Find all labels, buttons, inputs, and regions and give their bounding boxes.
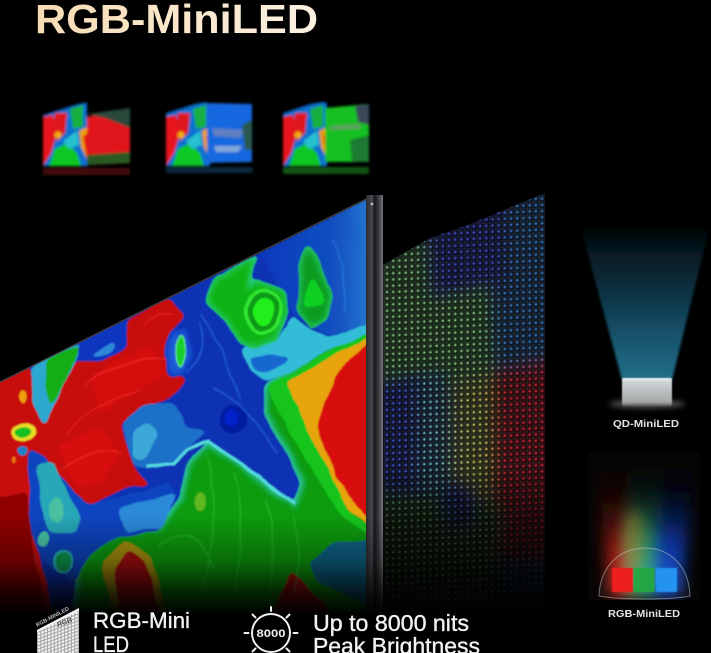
thumbnail: red scene (43, 102, 130, 175)
panel bottom fade (383, 465, 551, 615)
glass dome (599, 548, 690, 599)
cyan line (147, 442, 295, 504)
LED backlight panel (383, 193, 545, 604)
icon: LED panel: RGB-MINILED (35, 606, 70, 629)
top right blue (260, 200, 366, 336)
TV bezel (366, 195, 383, 620)
thumbnail row: three TV demos (43, 100, 369, 175)
main red region (0, 298, 186, 610)
green chip (634, 568, 654, 592)
light beam (580, 225, 710, 380)
cyan swirl (241, 316, 366, 382)
text (93, 608, 190, 653)
bottom black band (0, 613, 560, 653)
panel colour zones dim tint (383, 193, 545, 556)
orange wedge (286, 337, 366, 524)
green band (268, 333, 366, 534)
RGB-MiniLED diagram (590, 470, 700, 617)
feature: RGB-Mini LED (35, 606, 190, 653)
teal blob (37, 462, 82, 533)
TV bottom fade (0, 515, 384, 615)
small oval D (166, 328, 193, 375)
icon: 8000 sun (244, 607, 298, 652)
lower-left blue basin (28, 448, 177, 582)
left green sliver (32, 342, 83, 427)
top edge of TV (0, 199, 366, 382)
LED dots (385, 194, 544, 602)
thumbnail: blue scene (166, 101, 253, 173)
top blue pocket (76, 322, 128, 362)
thumbnail: green scene (283, 100, 369, 174)
panel grid lines (383, 195, 545, 544)
text (313, 610, 480, 653)
dark backdrop (588, 453, 700, 600)
icon: 8000 sun: 8000 (256, 628, 286, 640)
red wedge (317, 344, 366, 518)
dark hole (219, 406, 247, 434)
yellow green spot (11, 423, 37, 440)
dark red shadow (0, 492, 42, 600)
green drop (298, 246, 331, 327)
mid light blue (122, 403, 207, 468)
base glow (609, 400, 685, 408)
top green region (207, 257, 287, 347)
warm mix in beam centre (623, 510, 645, 570)
inner blue of cyan swirl (250, 354, 288, 373)
icon: LED panel (35, 606, 79, 653)
red chip (612, 568, 633, 592)
label: QD-MiniLED (613, 418, 679, 430)
blue chip (656, 568, 677, 592)
green circle (246, 290, 281, 333)
TV screen: fluid colour artwork (0, 200, 366, 611)
coloured beams (594, 483, 697, 600)
marbling streaks (60, 240, 345, 600)
QD-MiniLED diagram (580, 225, 710, 430)
LED block (622, 378, 672, 406)
text: RGB-Mini (93, 608, 190, 633)
feature: peak brightness (244, 607, 480, 653)
label: RGB-MiniLED (608, 608, 680, 620)
text: Up to 8000 nits (313, 610, 469, 636)
big green area (72, 344, 366, 610)
icon: LED panel: RGB (56, 617, 73, 629)
lower red and teal patches (101, 540, 165, 610)
